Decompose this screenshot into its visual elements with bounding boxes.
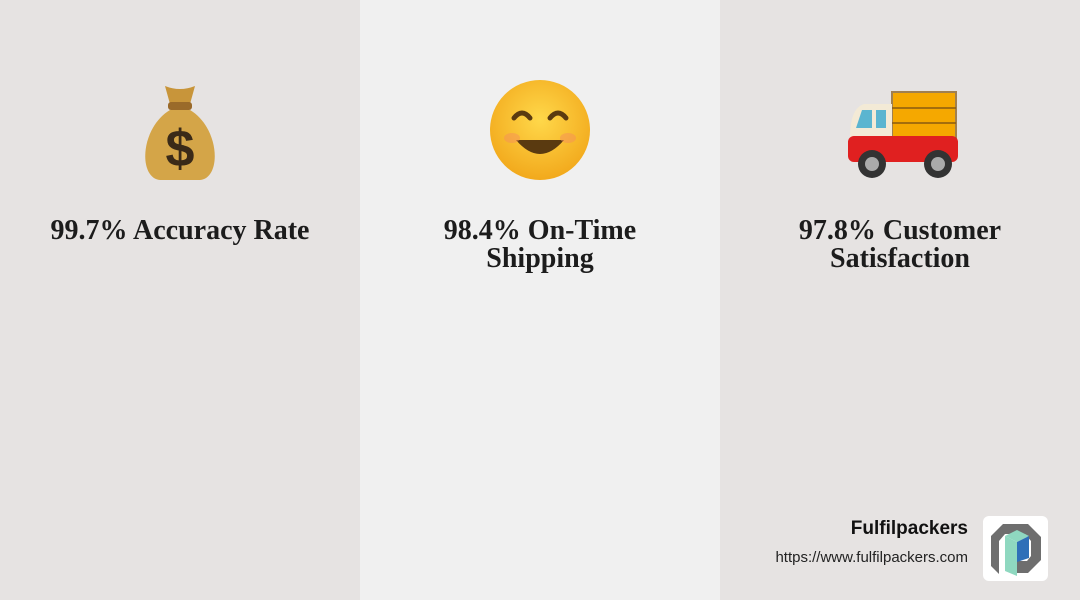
brand name: Fulfilpackers (851, 518, 968, 539)
icon: smiley (490, 80, 590, 180)
brand url: https://www.fulfilpackers.com (775, 549, 968, 566)
logo (983, 516, 1048, 581)
heading: on-time (444, 215, 636, 274)
heading: satisfaction (799, 215, 1001, 274)
panel: accuracy (0, 0, 360, 600)
heading: satisfaction: Satisfaction (830, 243, 970, 274)
panel: satisfaction (720, 0, 1080, 600)
heading: on-time: Shipping (486, 243, 594, 274)
icon: money bag (145, 86, 215, 180)
icon: money bag: $ (166, 120, 195, 178)
heading: accuracy: 99.7% Accuracy Rate (51, 215, 309, 246)
heading: satisfaction: 97.8% Customer (799, 215, 1001, 246)
icon: truck (848, 91, 958, 178)
heading: on-time: 98.4% On-Time (444, 215, 636, 246)
brand block (775, 516, 1048, 581)
panel: on-time shipping (360, 0, 720, 600)
